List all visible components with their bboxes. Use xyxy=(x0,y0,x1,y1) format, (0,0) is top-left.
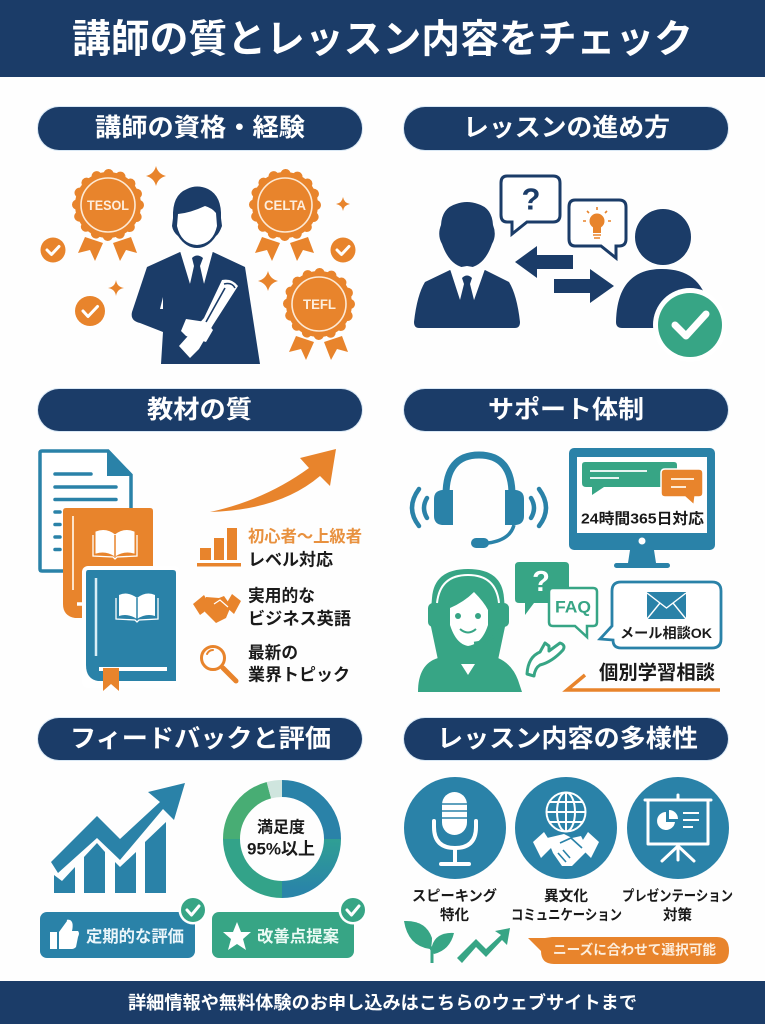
icon: question speech bubble: ? xyxy=(522,182,540,216)
panel: レッスン内容の多様性 xyxy=(403,717,733,964)
heading: サポート体制: サポート体制 xyxy=(488,396,644,424)
icon: question speech bubble xyxy=(501,176,560,234)
icon: TEFL rosette: TEFL xyxy=(303,296,336,312)
icon: sprout xyxy=(404,921,454,963)
label: presentation: 対策 xyxy=(663,906,692,924)
heading: 講師の資格・経験: 講師の資格・経験 xyxy=(95,114,305,142)
icon: sparkles xyxy=(108,166,350,296)
arrow: rising orange curve xyxy=(210,449,336,512)
icon: orange check marks xyxy=(40,238,356,326)
icon: student silhouette with check xyxy=(616,209,727,362)
chart: satisfaction donut: 満足度 xyxy=(257,818,305,836)
chart: satisfaction donut: 95%以上 xyxy=(247,840,315,858)
label: speaking: スピーキング xyxy=(412,887,497,905)
icon: support agent woman xyxy=(418,569,564,692)
icon: monitor with chat xyxy=(569,448,715,568)
text: level support: レベル対応 xyxy=(248,550,333,570)
callout: selectable to needs xyxy=(528,937,729,964)
label: speaking: 特化 xyxy=(440,907,469,924)
label: presentation: プレゼンテーション xyxy=(622,887,733,905)
badge: regular evaluation xyxy=(40,896,208,958)
icon: orange handshake xyxy=(193,594,241,623)
icon: globe and handshake xyxy=(515,777,617,879)
badge: regular evaluation: 定期的な評価 xyxy=(86,928,184,946)
chart: satisfaction donut xyxy=(232,788,332,890)
callout: mail consultation xyxy=(600,582,721,648)
text: practical business English: 実用的な xyxy=(248,586,315,606)
callout: selectable to needs: ニーズに合わせて選択可能 xyxy=(553,942,716,958)
text: practical business English: ビジネス英語 xyxy=(248,608,351,628)
text: practical business English xyxy=(248,586,351,628)
icon: TESOL rosette: TESOL xyxy=(87,197,129,213)
title banner xyxy=(0,0,765,77)
heading: サポート体制 xyxy=(403,388,729,432)
icon: teacher silhouette xyxy=(414,202,520,328)
icon: man in suit with diploma xyxy=(132,186,260,364)
footer banner: 詳細情報や無料体験のお申し込みはこちらのウェブサイトまで xyxy=(128,992,637,1013)
badge: improvement suggestions xyxy=(212,896,368,958)
icon: question bubble: ? xyxy=(532,566,550,598)
icon: TESOL rosette xyxy=(75,172,141,261)
panel: 講師の資格・経験 xyxy=(37,106,363,364)
icon: CELTA rosette: CELTA xyxy=(264,197,306,213)
heading: レッスン内容の多様性 xyxy=(403,717,729,761)
text: level support xyxy=(248,528,362,570)
icon: TEFL rosette xyxy=(286,271,352,360)
icon: level bar chart xyxy=(197,528,241,566)
icon: microphone xyxy=(404,777,506,879)
icon: presentation board xyxy=(627,777,729,879)
icon: document xyxy=(40,450,132,571)
icon: blue book xyxy=(82,566,180,691)
icon: monitor with chat: 24時間365日対応 xyxy=(581,510,704,528)
heading: フィードバックと評価 xyxy=(37,717,363,761)
footer banner xyxy=(0,981,765,1024)
text: latest industry topics: 業界トピック xyxy=(248,666,350,684)
arrow: green zigzag xyxy=(457,928,510,963)
heading: 教材の質 xyxy=(37,388,363,432)
panel: 教材の質 xyxy=(37,388,363,691)
title banner: 講師の質とレッスン内容をチェック xyxy=(72,18,693,62)
icon: question bubble xyxy=(515,562,569,615)
heading: 講師の資格・経験 xyxy=(37,106,363,151)
heading: 教材の質: 教材の質 xyxy=(147,396,252,424)
panel: サポート体制 xyxy=(403,388,729,692)
icon: lightbulb speech bubble xyxy=(569,200,626,258)
label: cross-cultural communication xyxy=(511,887,622,924)
icon: headset xyxy=(412,455,546,548)
heading: フィードバックと評価: フィードバックと評価 xyxy=(70,725,331,753)
label: individual consultation with underline xyxy=(567,661,720,690)
label: speaking xyxy=(412,887,497,924)
icon: CELTA rosette xyxy=(252,172,318,261)
chart: rising bars with arrow xyxy=(51,783,185,893)
label: cross-cultural communication: 異文化 xyxy=(544,887,589,905)
panel: レッスンの進め方 xyxy=(403,106,729,362)
callout: mail consultation: メール相談OK xyxy=(620,625,712,641)
icon: FAQ bubble xyxy=(549,588,597,637)
icon: orange book xyxy=(63,508,153,618)
arrow: right xyxy=(554,269,614,303)
badge: improvement suggestions: 改善点提案 xyxy=(257,927,340,946)
arrow: left xyxy=(515,246,573,278)
label: presentation xyxy=(622,887,733,924)
panel: フィードバックと評価 xyxy=(37,717,368,958)
heading: レッスンの進め方: レッスンの進め方 xyxy=(463,114,670,142)
label: cross-cultural communication: コミュニケーション xyxy=(511,907,622,924)
icon: FAQ bubble: FAQ xyxy=(555,598,591,616)
label: individual consultation with underline: 個別学習相談 xyxy=(599,661,715,684)
text: latest industry topics: 最新の xyxy=(248,644,298,662)
heading: レッスン内容の多様性: レッスン内容の多様性 xyxy=(437,725,698,753)
icon: magnifier xyxy=(202,646,236,681)
text: level support: 初心者〜上級者 xyxy=(248,528,362,546)
text: latest industry topics xyxy=(248,644,350,684)
heading: レッスンの進め方 xyxy=(403,106,729,151)
